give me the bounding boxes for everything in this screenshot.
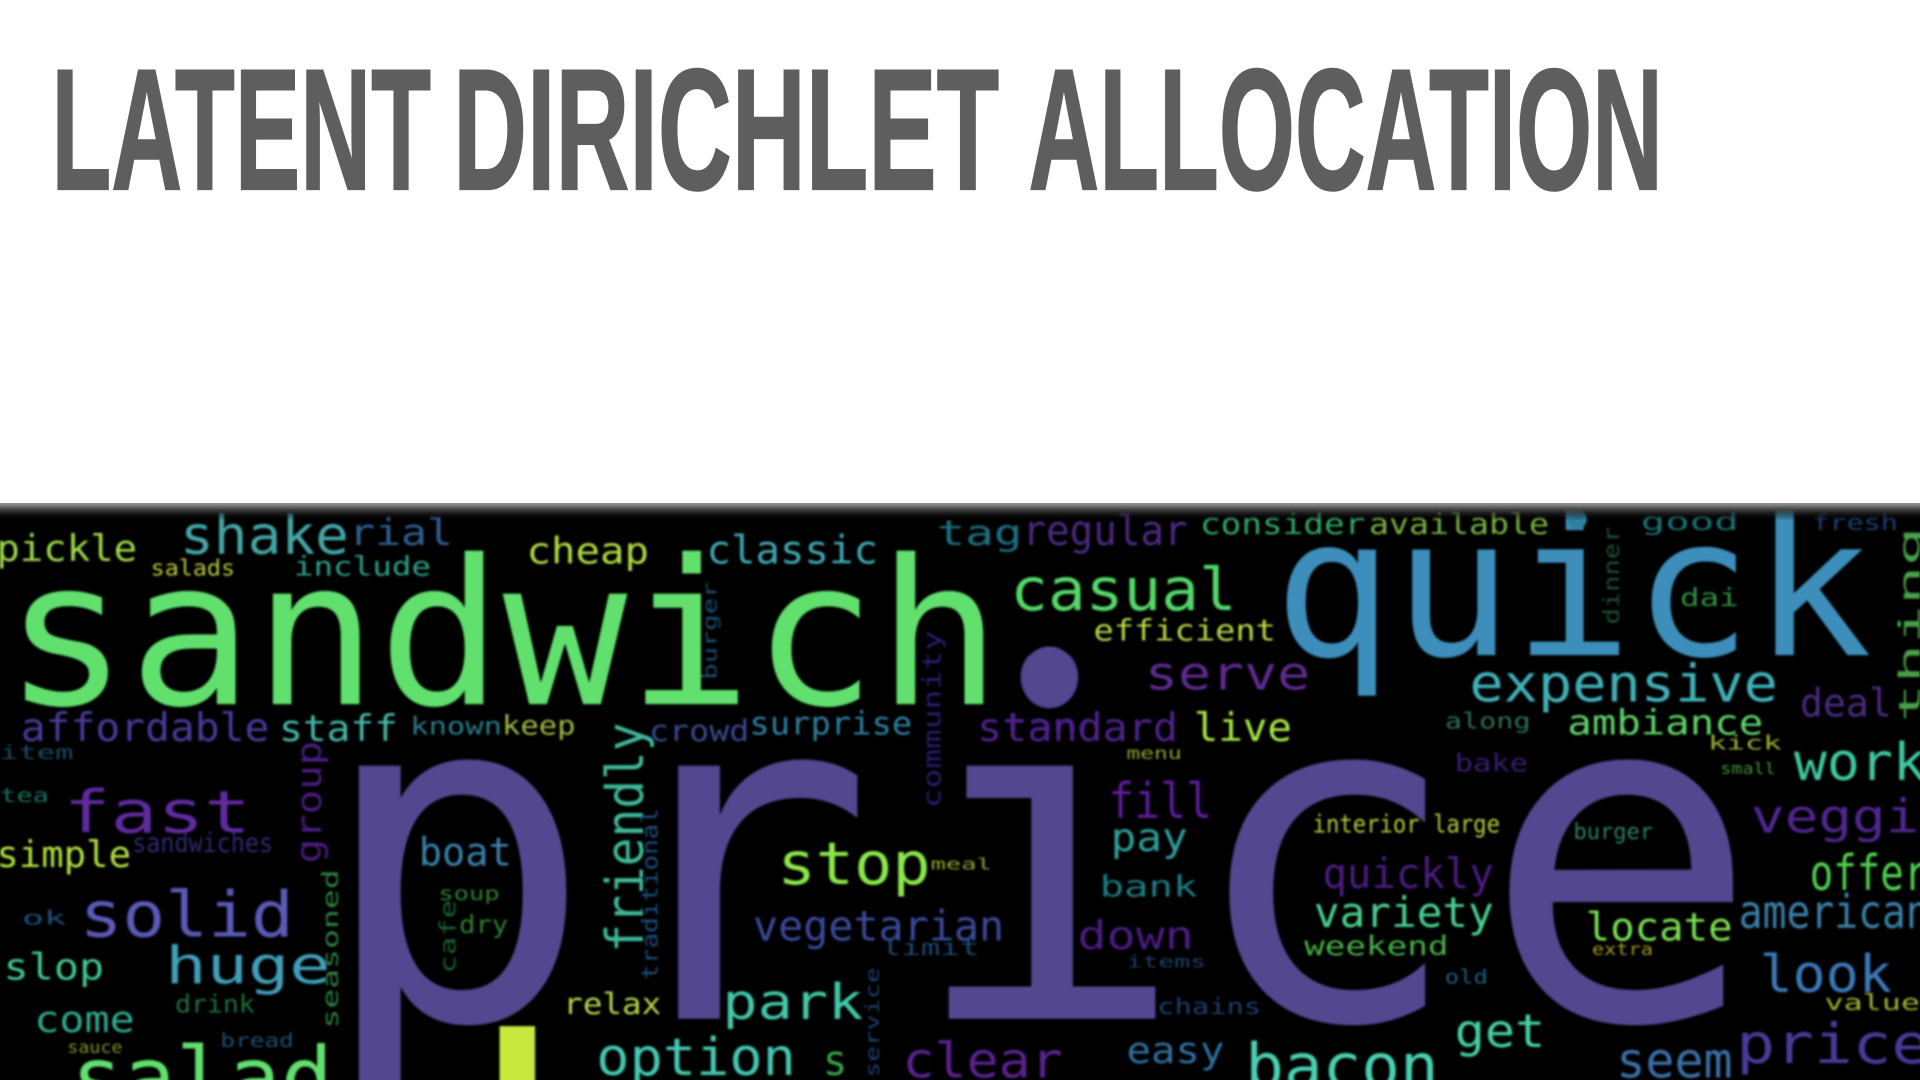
small faint words: item [0, 741, 73, 764]
medium words: shake [180, 503, 349, 566]
small faint words: chains [1157, 995, 1261, 1020]
medium words: quickly [1322, 849, 1494, 898]
small faint words: kick [1708, 731, 1782, 754]
title: LATENT [51, 33, 431, 226]
small faint words: burger [1573, 820, 1653, 845]
medium words: casual [1010, 555, 1237, 624]
medium words: easy [1127, 1029, 1224, 1072]
small faint words: extra [1592, 940, 1653, 960]
medium words: look [1760, 945, 1892, 1005]
vertical words: dinner [1600, 527, 1625, 624]
small faint words: along [1445, 710, 1531, 735]
small faint words: drink [175, 990, 255, 1019]
medium words: staff [279, 707, 398, 750]
medium words [0, 503, 1920, 1080]
small faint words: limit [882, 936, 980, 961]
small faint words: value [1824, 991, 1920, 1016]
small faint words: sandwiches [132, 828, 273, 859]
medium words: simple [0, 833, 131, 876]
medium words: relax [563, 987, 661, 1021]
medium words: locate [1586, 905, 1733, 950]
vertical words [290, 527, 1920, 1078]
small faint words: dai [1680, 583, 1739, 612]
small faint words: good [1641, 507, 1739, 536]
small faint words: ok [22, 906, 67, 929]
medium words: deal [1800, 681, 1892, 726]
word: quick: quick [1273, 475, 1872, 701]
medium words: interior large [1313, 810, 1500, 839]
small faint words: sauce [67, 1038, 122, 1058]
small faint words: small [1720, 759, 1776, 778]
vertical words: group [290, 741, 330, 863]
medium words: variety [1314, 888, 1494, 937]
medium words: serve [1145, 646, 1310, 700]
title: DIRICHLET [453, 33, 999, 226]
small faint words: meal [931, 854, 992, 873]
medium words: expensive [1469, 655, 1778, 715]
medium words: slop [4, 946, 104, 989]
vertical words: service [861, 967, 884, 1078]
medium words: down [1078, 914, 1194, 959]
small faint words: tea [0, 784, 49, 807]
medium words: weekend [1304, 931, 1449, 962]
word: sandwich: sandwich [4, 516, 1002, 752]
medium words: standard [977, 706, 1178, 751]
medium words: available [1369, 507, 1549, 541]
vertical words: community [917, 631, 946, 808]
medium words: get [1455, 1004, 1545, 1058]
medium words: crowd [649, 714, 749, 748]
vertical words: traditional [639, 808, 664, 980]
medium words: regular [1022, 506, 1188, 555]
medium words: pickle [0, 527, 137, 570]
medium words: huge [165, 936, 331, 996]
medium words: known [410, 712, 502, 741]
small faint words: bread [220, 1029, 294, 1052]
medium words: salads [151, 557, 235, 582]
medium words: park [722, 974, 863, 1031]
medium words: solid [80, 879, 294, 953]
small faint words: dry [459, 910, 508, 939]
medium words: live [1194, 706, 1292, 751]
medium words: efficient [1093, 613, 1276, 647]
word cloud image [0, 475, 1920, 1080]
small faint words: old [1445, 965, 1488, 988]
medium words: stop [778, 829, 931, 898]
medium words: rial [349, 511, 453, 554]
small faint words: fresh [1812, 511, 1898, 536]
medium words: ambiance [1567, 704, 1763, 744]
small faint words: items [1127, 952, 1206, 972]
medium words: consider [1200, 507, 1365, 541]
vertical words: burger [698, 581, 721, 680]
top shadow edge of image [0, 503, 1920, 520]
vertical words: cafe [437, 900, 462, 973]
medium words: work [1794, 733, 1920, 793]
small faint words [0, 507, 1920, 1080]
medium words: surprise [749, 705, 912, 743]
medium words: tag [937, 514, 1022, 554]
small faint words: soup [438, 882, 500, 905]
medium words: include [294, 552, 431, 583]
medium words: pay [1111, 816, 1188, 861]
medium words: classic [707, 528, 878, 573]
vertical words: seasoned [319, 869, 344, 1029]
medium words: boat [419, 831, 512, 876]
vertical words: friendly [596, 722, 656, 953]
small faint words: menu [1127, 744, 1182, 764]
small faint words: bake [1455, 748, 1528, 777]
medium words: cheap [527, 529, 649, 572]
medium words: keep [502, 711, 576, 742]
medium words: affordable [21, 706, 269, 751]
medium words: vegetarian [753, 901, 1004, 950]
medium words: bank [1100, 869, 1198, 903]
medium words: fill [1108, 773, 1212, 830]
medium words: veggie [1751, 790, 1920, 844]
medium words: come [34, 998, 135, 1041]
medium words: fast [64, 778, 251, 847]
title [51, 33, 1663, 226]
